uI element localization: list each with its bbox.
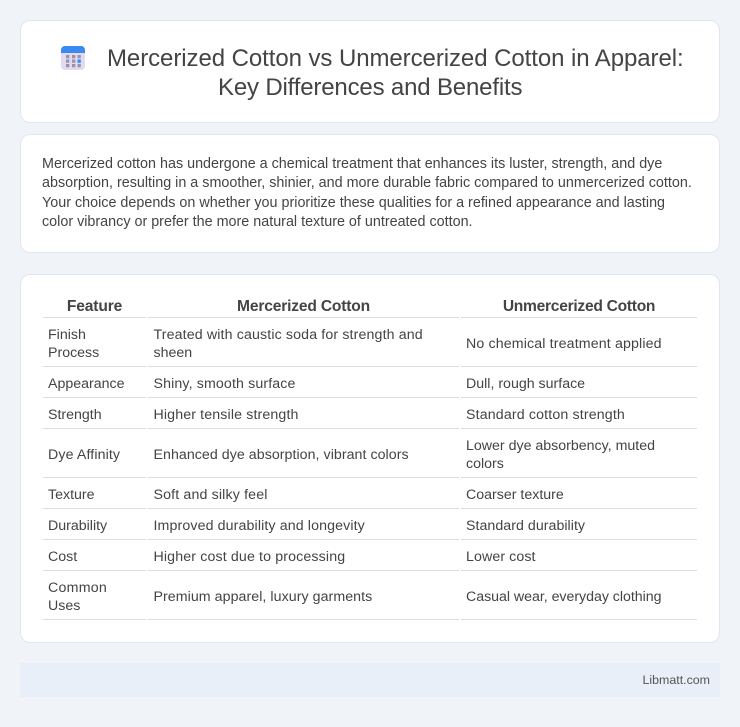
row: Common Uses [48, 580, 661, 614]
footer bar [20, 663, 720, 697]
row: Finish Process [48, 327, 662, 361]
table header: Mercerized Cotton: Mercerized Cotton [237, 298, 370, 315]
row: Texture: Coarser texture [466, 487, 564, 503]
row: Appearance [48, 376, 585, 392]
row: Durability: Durability [48, 518, 107, 534]
row: Strength: Standard cotton strength [466, 407, 625, 423]
row: Appearance: Shiny, smooth surface [154, 376, 296, 392]
table header: Feature: Feature [67, 298, 122, 315]
row: Durability: Improved durability and longevity [154, 518, 365, 534]
row: Finish Process: Treated with caustic soda for strength and [154, 327, 423, 343]
row: Cost: Lower cost [466, 549, 536, 565]
title [107, 45, 684, 101]
row: Strength [48, 407, 625, 423]
row: Dye Affinity: Dye Affinity [48, 447, 120, 463]
text block: intro: Your choice depends on whether you prioritize these qualities for a refined appearance and lasting [42, 195, 665, 211]
panel: title card [20, 20, 720, 123]
row: Texture: Soft and silky feel [154, 487, 268, 503]
row: Finish Process: No chemical treatment applied [466, 336, 662, 352]
icon: calendar [61, 46, 85, 70]
row: Texture: Texture [48, 487, 95, 503]
row: Appearance: Appearance [48, 376, 125, 392]
row: Strength: Strength [48, 407, 102, 423]
text block: intro: color vibrancy or prefer the more natural texture of untreated cotton. [42, 214, 473, 230]
row: Common Uses: Premium apparel, luxury garments [154, 589, 372, 605]
row: Dye Affinity: Lower dye absorbency, muted [466, 438, 655, 454]
row: Finish Process: Process [48, 345, 99, 361]
panel: comparison table [20, 274, 720, 643]
title: Mercerized Cotton vs Unmercerized Cotton in Apparel: [107, 45, 684, 72]
row: Durability [48, 518, 585, 534]
footer text: Libmatt.com [643, 673, 710, 687]
text block: intro: absorption, resulting in a smoother, shinier, and more durable fabric compared to unmercerized cotton. [42, 175, 692, 191]
table header: Unmercerized Cotton: Unmercerized Cotton [503, 298, 655, 315]
row: Common Uses: Uses [48, 598, 80, 614]
row: Finish Process: Finish [48, 327, 86, 343]
row: Cost: Higher cost due to processing [154, 549, 345, 565]
panel: intro paragraph [20, 134, 720, 253]
title: Key Differences and Benefits [218, 74, 522, 101]
row: Texture [48, 487, 564, 503]
row: Common Uses: Common [48, 580, 107, 596]
row: Common Uses: Casual wear, everyday clothing [466, 589, 661, 605]
row: Dye Affinity [48, 438, 655, 472]
row: Dye Affinity: colors [466, 456, 504, 472]
row: Durability: Standard durability [466, 518, 585, 534]
row: Strength: Higher tensile strength [154, 407, 299, 423]
text block: intro [42, 156, 692, 230]
text block: intro: Mercerized cotton has undergone a chemical treatment that enhances its luster, strength, and dye [42, 156, 662, 172]
row: Dye Affinity: Enhanced dye absorption, vibrant colors [154, 447, 409, 463]
row: Cost [48, 549, 536, 565]
row: Cost: Cost [48, 549, 77, 565]
row: Finish Process: sheen [154, 345, 192, 361]
row: Appearance: Dull, rough surface [466, 376, 585, 392]
